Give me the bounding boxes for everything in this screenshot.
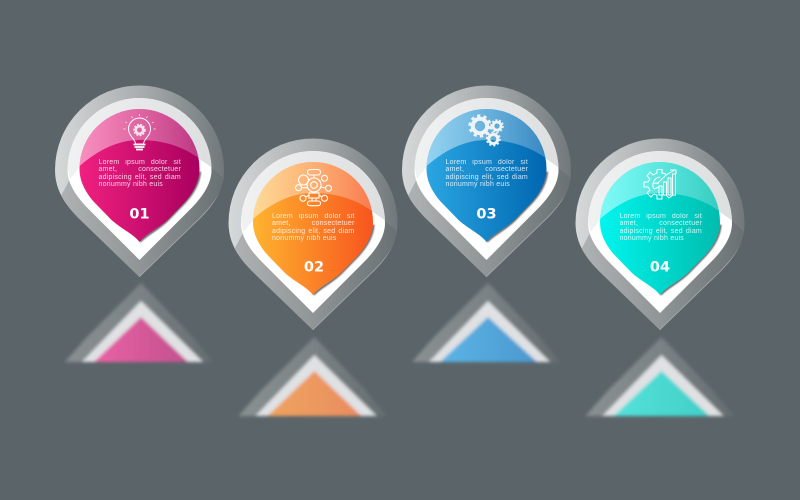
text block: adipiscing elit, sed diam <box>620 228 702 235</box>
number: 03 <box>476 206 497 222</box>
text block: Lorem ipsum dolor sit <box>272 212 354 220</box>
reflection: pin 1 <box>65 283 213 362</box>
pin 4: teal <box>576 138 744 330</box>
text block: Lorem ipsum dolor sit <box>446 158 528 166</box>
text block: Lorem ipsum dolor sit <box>98 158 181 166</box>
text block <box>272 212 358 246</box>
number: 01 <box>129 206 150 222</box>
reflection: pin 4 <box>586 337 734 416</box>
text block: nonummy nibh euis <box>620 235 684 242</box>
pin 2: orange <box>228 138 398 330</box>
text block: nonummy nibh euis <box>98 181 163 188</box>
text block: amet, consectetuer <box>620 220 702 227</box>
number: 04 <box>650 260 670 276</box>
text block: nonummy nibh euis <box>446 181 510 188</box>
text block: Lorem ipsum dolor sit <box>620 212 702 220</box>
icon: light bulb with gear <box>124 114 156 150</box>
icon: gear with bar chart <box>644 170 676 199</box>
text block: amet, consectetuer <box>272 220 354 227</box>
text block: amet, consectetuer <box>446 166 528 173</box>
text block: adipiscing elit, sed diam <box>446 174 528 181</box>
icon: network diagram <box>296 170 332 206</box>
text block: nonummy nibh euis <box>272 235 336 242</box>
reflection: pin 3 <box>412 283 560 362</box>
reflection: pin 2 <box>238 337 386 416</box>
text block: adipiscing elit, sed diam <box>272 228 354 235</box>
text block <box>446 158 532 192</box>
number: 02 <box>304 260 324 276</box>
text block <box>620 212 706 246</box>
pin 3: blue <box>402 86 571 277</box>
text block: amet, consectetuer <box>98 166 181 173</box>
text block: adipiscing elit, sed diam <box>98 174 181 181</box>
text block <box>98 158 184 192</box>
pin 1: pink <box>55 86 224 277</box>
icon: gears <box>470 116 503 145</box>
